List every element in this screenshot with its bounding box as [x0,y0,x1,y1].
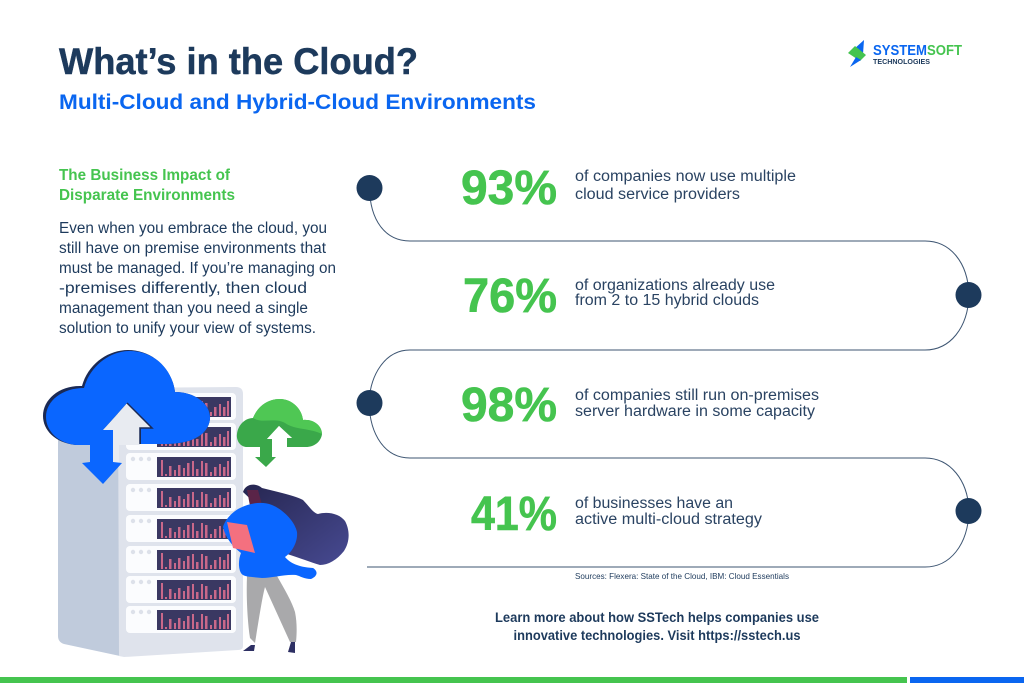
hair [243,485,349,565]
section heading [59,167,235,204]
stat: 41% [471,488,762,541]
sources note: Sources: Flexera: State of the Cloud, IBM: Cloud Essentials [575,571,789,581]
icon: logo bolt [848,40,866,67]
call to action: Learn more about how SSTech helps companies use [495,610,819,625]
body paragraph: -premises differently, then cloud [59,280,307,297]
body paragraph: must be managed. If you’re managing on [59,260,336,277]
footer bar: green [0,677,907,683]
connector path [367,188,969,567]
body paragraph [59,220,336,337]
stat number: 76% [463,270,557,323]
body paragraph: Even when you embrace the cloud, you [59,220,327,237]
tablet [227,522,255,553]
node dots [356,175,982,524]
panel: business impact text [59,167,336,337]
stat description: server hardware in some capacity [575,403,815,420]
stat: 93% [461,162,796,215]
stat description [575,277,775,309]
icon: small green cloud [237,399,322,467]
illustration: server, clouds and woman [43,350,349,657]
face [247,490,262,506]
logo tagline: TECHNOLOGIES [873,57,930,66]
body paragraph: solution to unify your view of systems. [59,320,316,337]
stat description: from 2 to 15 hybrid clouds [575,292,759,309]
icon: download arrow [82,445,122,484]
logo: SystemSoft Technologies [848,40,962,67]
stat description: cloud service providers [575,186,740,203]
body paragraph: still have on premise environments that [59,240,327,257]
section heading: The Business Impact of [59,167,231,184]
stat: 76% [463,270,775,323]
sweater [223,503,317,579]
stat number: 41% [471,488,557,541]
logo wordmark: SYSTEMSOFT [873,43,962,59]
stat: 98% [461,379,819,432]
footer bar: blue [910,677,1024,683]
stat description [575,495,762,528]
stat description: active multi-cloud strategy [575,511,762,528]
stat number: 93% [461,162,557,215]
stat description [575,387,819,420]
subtitle: Multi-Cloud and Hybrid-Cloud Environments [59,91,536,114]
server rack [58,387,243,657]
stat description: of businesses have an [575,495,733,512]
body paragraph: management than you need a single [59,300,308,317]
call to action: innovative technologies. Visit https://sstech.us [514,628,800,643]
icon: upload arrow [103,404,152,464]
call to action [495,610,819,643]
stat description: of companies now use multiple [575,168,796,185]
section heading: Disparate Environments [59,187,235,204]
icon: large blue cloud [43,350,210,484]
stat description: of companies still run on-premises [575,387,819,404]
title: What’s in the Cloud? [59,41,418,82]
woman with tablet [223,485,349,653]
legs [247,576,297,643]
shoes [243,642,295,653]
icon: green cloud arrows [267,426,292,447]
stat description [575,168,796,203]
stat description: of organizations already use [575,277,775,294]
stat number: 98% [461,379,557,432]
